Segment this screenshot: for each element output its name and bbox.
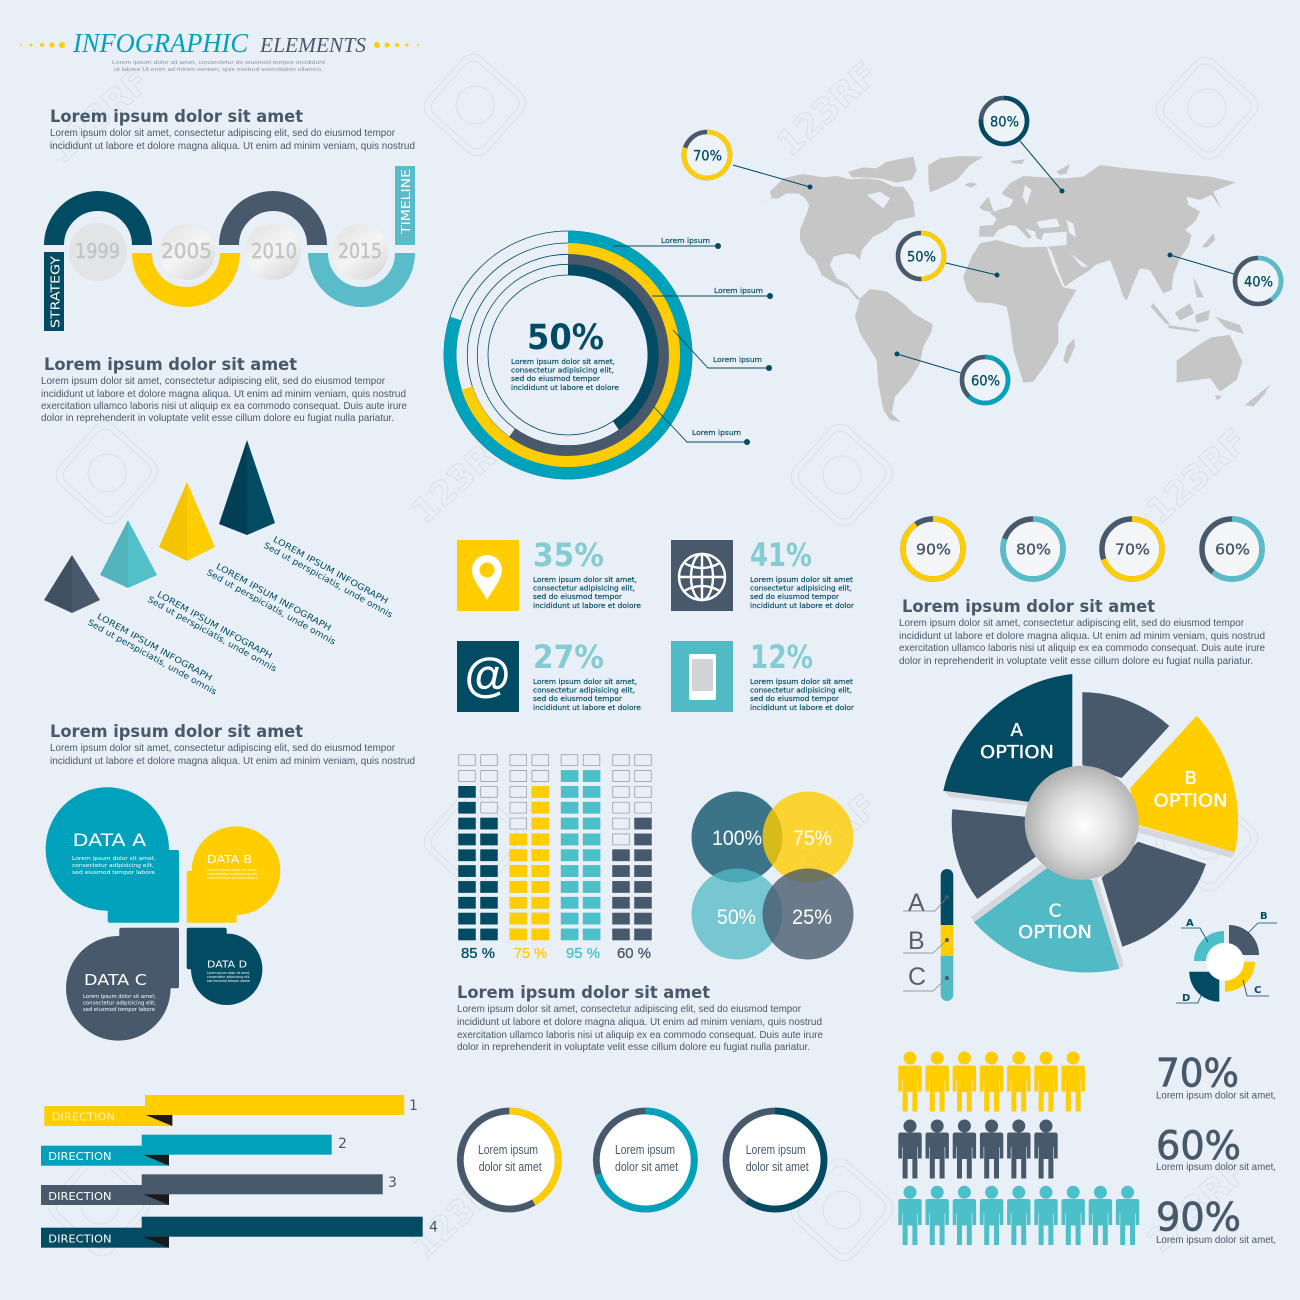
pyramid captions: Sed ut perspiciatis, unde omnis [205,568,338,648]
donut: 90% [903,519,963,579]
column: 85 %: 85 % [461,945,495,962]
shape: data C: Lorem ipsum dolor sit amet, [83,994,157,1000]
ribbon 4 [41,1217,438,1248]
pyramid: yellow [159,482,215,561]
text: 123RF [41,791,157,902]
vertical legend bar: B [908,927,925,955]
stat: 35%: incididunt ut labore et dolore [533,602,641,610]
people stats: 60% [1156,1124,1241,1169]
text block: data shapes intro: Lorem ipsum dolor sit amet [50,722,303,742]
donut: 70%: 70% [1115,540,1150,558]
people stats: 90% [1156,1196,1241,1241]
timeline: STRATEGY [48,256,62,328]
stat: 27%: incididunt ut labore et dolore [533,704,641,712]
people stats: Lorem ipsum dolor sit amet, [1156,1089,1276,1101]
icon: map pin [457,540,519,611]
stat: 12%: sed do eiusmod tempor [750,695,839,703]
people row: 70% [898,1052,1085,1112]
ribbon 3: 3 [388,1175,397,1191]
shape: data B: sed eiusmod tempor labore [207,876,258,880]
segment: C option: OPTION [1018,922,1092,943]
donut: 70%: 70% [693,148,722,164]
shape: data B: consectetur adipisicing elit, [207,872,258,876]
pyramid: slate [44,555,100,613]
ribbon 1: 1 [409,1098,418,1114]
timeline: 2010 [251,239,297,263]
percent donuts row [903,519,1262,579]
segment: B option: B [1185,768,1197,789]
icon: smartphone [671,641,733,712]
ring badge: cyan: dolor sit amet [615,1159,678,1174]
text block: timeline intro: incididunt ut labore et dolore magna aliqua. Ut enim ad minim veniam, quis nostrud [50,141,415,152]
shape: data C [66,928,179,1041]
venn diagram: 25% [792,906,832,929]
callouts: radial chart labels [613,237,773,445]
pyramid captions: Sed ut perspiciatis, unde omnis [86,618,219,698]
pyramid captions: LOREM IPSUM INFOGRAPH [155,590,274,662]
segment: C option: C [1049,901,1061,922]
title: Lorem ipsum dolor sit amet, consectetur do eiusmod tempor incididunt [112,60,326,66]
people stats: Lorem ipsum dolor sit amet, [1156,1234,1276,1246]
ring badge: navy: dolor sit amet [746,1159,809,1174]
shape: data C: consectetur adipisicing elit, [83,1000,157,1006]
shape: data A: DATA A [73,831,147,851]
stat: 27% [457,638,641,712]
segment: C option [974,868,1119,972]
venn diagram: 100% [712,827,762,850]
segment: A option: A [1011,720,1024,741]
stat: 35%: 35% [533,536,604,574]
segment: B option: OPTION [1154,790,1228,812]
shape: data A: consectetur adipisicing elit, [72,863,154,869]
text block: data shapes intro: Lorem ipsum dolor sit amet, consectetur adipiscing elit, sed do eiusmod tempor [50,743,395,754]
people row: 60% [898,1120,1058,1178]
pyramid captions: Sed ut perspiciatis, unde omnis [262,541,395,621]
ribbon 1: DIRECTION [52,1112,115,1124]
column: 75 % [510,786,549,962]
callouts: radial chart labels: Lorem ipsum [714,287,763,295]
text: 123RF [769,54,885,165]
text block: right column [899,597,1265,667]
stat: 12% [671,638,854,712]
text: 123RF [404,1156,520,1267]
segmented pie [943,674,1238,972]
donut: 90%: 90% [916,540,951,558]
pyramid captions: LOREM IPSUM INFOGRAPH [95,612,214,684]
donut: 60% [962,357,1008,403]
text block: right column: Lorem ipsum dolor sit amet, consectetur adipiscing elit, sed do eiusmod tempor [899,618,1244,629]
ring badge: yellow: Lorem ipsum [478,1142,538,1157]
column: 75 %: 75 % [514,945,547,962]
people stats [1156,1052,1276,1246]
donut: 70% [1102,519,1162,579]
text block: right column: dolor in reprehenderit in voluptate velit esse cillum dolore eu fugiat nulla pariatur. [899,656,1253,667]
shape: data D: Lorem ipsum dolor sit amet, [207,971,250,975]
ribbon 2 [41,1135,347,1166]
venn diagram: 75% [793,827,832,850]
icon: globe [671,540,733,611]
callouts: radial chart labels: Lorem ipsum [692,429,741,437]
ring badge: yellow [460,1111,558,1209]
mini segmented donut: D [1182,993,1190,1004]
pyramid captions: Sed ut perspiciatis, unde omnis [146,595,279,675]
stat: 41%: incididunt ut labore et dolor [750,602,854,610]
shape: data B: Lorem ipsum dolor sit amet, [207,868,258,872]
stat: 41%: sed do eiusmod tempor [750,593,839,601]
stat: 12%: 12% [750,638,813,676]
donut: 40%: 40% [1244,274,1273,290]
text block: strategy copy: Lorem ipsum dolor sit amet, consectetur adipiscing elit, sed do eiusmod tempor [41,376,385,387]
timeline [44,166,415,331]
donut: 80% [981,98,1027,144]
pyramid captions: LOREM IPSUM INFOGRAPH [271,535,390,607]
stat: 12%: incididunt ut labore et dolor [750,704,854,712]
stat: 12%: consectetur adipisicing elit, [750,686,852,694]
mini segmented donut [1176,911,1277,1004]
text: 123RF [41,61,157,172]
ring badge: yellow: dolor sit amet [479,1159,542,1174]
pyramid captions [86,535,395,698]
venn diagram [692,792,854,960]
title: ELEMENTS [259,33,367,57]
stat: 41%: Lorem ipsum dolor sit amet [750,576,853,584]
shape: data B [187,826,280,923]
shape: data D: DATA D [207,960,247,970]
shape: data D: sed eiusmod tempor labore [207,979,250,983]
donut: 80% [1003,519,1063,579]
stat: 35% [457,536,641,611]
pyramid: teal [100,520,157,588]
ring badge: cyan: Lorem ipsum [615,1142,675,1157]
world map [753,156,1270,422]
mini segmented donut: B [1260,911,1268,922]
stat: 35%: consectetur adipisicing elit, [533,584,635,592]
ribbon 4: DIRECTION [48,1233,112,1245]
text block: data shapes intro [50,722,415,767]
radial progress chart [444,231,773,479]
timeline: 2015 [338,239,382,263]
stat: 41%: consectetur adipisicing elit, [750,584,852,592]
segment: left slate [952,809,1036,899]
timeline: TIMELINE [398,169,413,235]
donut: 50%: 50% [907,250,936,266]
ribbon 4: 4 [429,1220,438,1236]
segment: upper slate [1082,692,1169,778]
ribbon 3: DIRECTION [48,1191,112,1203]
text block: data shapes intro: incididunt ut labore et dolore magna aliqua. Ut enim ad minim veniam, quis nostrud [50,756,415,767]
ring badge: navy [726,1111,824,1209]
stat: 12%: Lorem ipsum dolor sit amet [750,678,853,686]
donut: 70% [684,132,730,178]
radial progress chart: Lorem ipsum dolor sit amet, [511,358,615,366]
segment: A option [943,674,1072,802]
text block: strategy copy [41,355,407,424]
ring badge: navy: Lorem ipsum [746,1142,806,1157]
donut: 80%: 80% [990,114,1019,130]
donut: 80%: 80% [1016,540,1051,558]
pyramid: navy [219,440,275,535]
text block: center column: Lorem ipsum dolor sit amet [457,983,710,1003]
shape: data C: sed eiusmod tempor labore [83,1007,155,1013]
ribbon 2: DIRECTION [48,1151,112,1163]
vertical legend bar: A [908,889,925,917]
ribbon 3 [41,1174,397,1205]
center sphere [1025,766,1139,880]
text block: right column: incididunt ut labore et dolore magna aliqua. Ut enim ad minim veniam, quis nostrud [899,631,1265,642]
shape: data B: DATA B [207,853,252,866]
ring badge: cyan [596,1111,694,1209]
segment: B option [1130,716,1238,852]
title: INFOGRAPHIC [72,28,249,58]
text: 123RF [1139,1151,1255,1262]
map callouts [684,98,1281,403]
title [20,28,419,73]
text block: strategy copy: exercitation ullamco laboris nisi ut aliquip ex ea commodo consequat. Duis aute irure [41,401,407,412]
radial progress chart: incididunt ut labore et dolore [511,384,619,392]
radial progress chart: sed do eiusmod tempor [511,375,600,383]
stat: 27%: 27% [533,638,604,676]
text block: center column: dolor in reprehenderit in voluptate velit esse cillum dolore eu fugiat nulla pariatur. [457,1042,810,1053]
text block: center column: incididunt ut labore et dolore magna aliqua. Ut enim ad minim veniam, quis nostrud [457,1017,822,1028]
stat: 35%: sed do eiusmod tempor [533,593,622,601]
text block: strategy copy: Lorem ipsum dolor sit amet [44,355,297,375]
venn diagram: 50% [717,906,756,929]
radial progress chart: consectetur adipisicing elit, [511,366,614,374]
shape: data A [46,787,179,923]
stat: 27%: sed do eiusmod tempor [533,695,622,703]
text block: timeline intro: Lorem ipsum dolor sit amet, consectetur adipiscing elit, sed do eiusmod tempor [50,128,395,139]
text: 123RF [769,786,885,897]
shape: data A: Lorem ipsum dolor sit amet, [72,856,156,862]
shape: data A: sed eiusmod tempor labore [72,870,156,876]
segment: lower slate [1102,842,1206,947]
column: 95 %: 95 % [566,945,600,962]
icon: at sign: @ [465,648,510,701]
text block: center column [457,983,823,1053]
column: 60 %: 60 % [617,945,651,962]
block bar chart [458,754,652,962]
text: 123RF [404,421,520,532]
ribbon 2: 2 [338,1136,347,1152]
people stats: Lorem ipsum dolor sit amet, [1156,1161,1276,1173]
text block: right column: Lorem ipsum dolor sit amet [902,597,1155,617]
text block: timeline intro: Lorem ipsum dolor sit amet [50,107,303,127]
direction ribbons [41,1095,438,1248]
shape: data D [187,928,262,1005]
ribbon 1 [44,1095,418,1126]
mini segmented donut: C [1254,985,1261,996]
text: 123RF [1139,421,1255,532]
radial progress chart: 50% [527,318,604,358]
vertical legend bar [903,869,953,1001]
shape: data C: DATA C [84,971,147,989]
donut: 60%: 60% [1215,540,1250,558]
donut: 50% [898,233,944,279]
stat: 41%: 41% [750,536,812,574]
shape: data D: consectetur adipisicing elit, [207,975,250,979]
people row: 90% [898,1186,1139,1245]
pyramid captions: LOREM IPSUM INFOGRAPH [214,562,333,634]
column: 60 % [612,818,652,962]
icon: at sign [457,641,519,712]
stat: 27%: Lorem ipsum dolor sit amet, [533,678,637,686]
callouts: radial chart labels: Lorem ipsum [713,356,762,364]
pyramids [44,440,395,698]
mini segmented donut: A [1186,918,1194,929]
text block: timeline intro [50,107,415,152]
stat: 41% [671,536,854,611]
stat: 35%: Lorem ipsum dolor sit amet, [533,576,637,584]
timeline: 1999 [75,239,120,263]
callouts: radial chart labels: Lorem ipsum [661,237,710,245]
people stats: 70% [1156,1052,1239,1097]
text block: center column: Lorem ipsum dolor sit amet, consectetur adipiscing elit, sed do eiusmod tempor [457,1004,801,1015]
column: 95 % [561,770,600,962]
donut: 60% [1202,519,1262,579]
data shapes [46,787,280,1041]
segment: A option: OPTION [980,742,1054,763]
vertical legend bar: C [908,963,926,991]
title: ut labore Ut enim ad minim veniam, quis nostrud exercitation ullamco. [114,67,324,73]
text block: strategy copy: dolor in reprehenderit in voluptate velit esse cillum dolore eu fugiat nulla pariatur. [41,413,394,424]
text block: strategy copy: incididunt ut labore et dolore magna aliqua. Ut enim ad minim veniam, quis nostrud [41,389,406,400]
stat: 27%: consectetur adipisicing elit, [533,686,635,694]
column: 85 % [458,786,498,962]
donut: 40% [1235,258,1281,304]
timeline: 2005 [161,239,212,263]
donut: 60%: 60% [971,374,1000,390]
text block: right column: exercitation ullamco laboris nisi ut aliquip ex ea commodo consequat. Duis aute irure [899,643,1265,654]
text block: center column: exercitation ullamco laboris nisi ut aliquip ex ea commodo consequat. Duis aute irure [457,1030,823,1041]
ring badges [460,1111,824,1209]
